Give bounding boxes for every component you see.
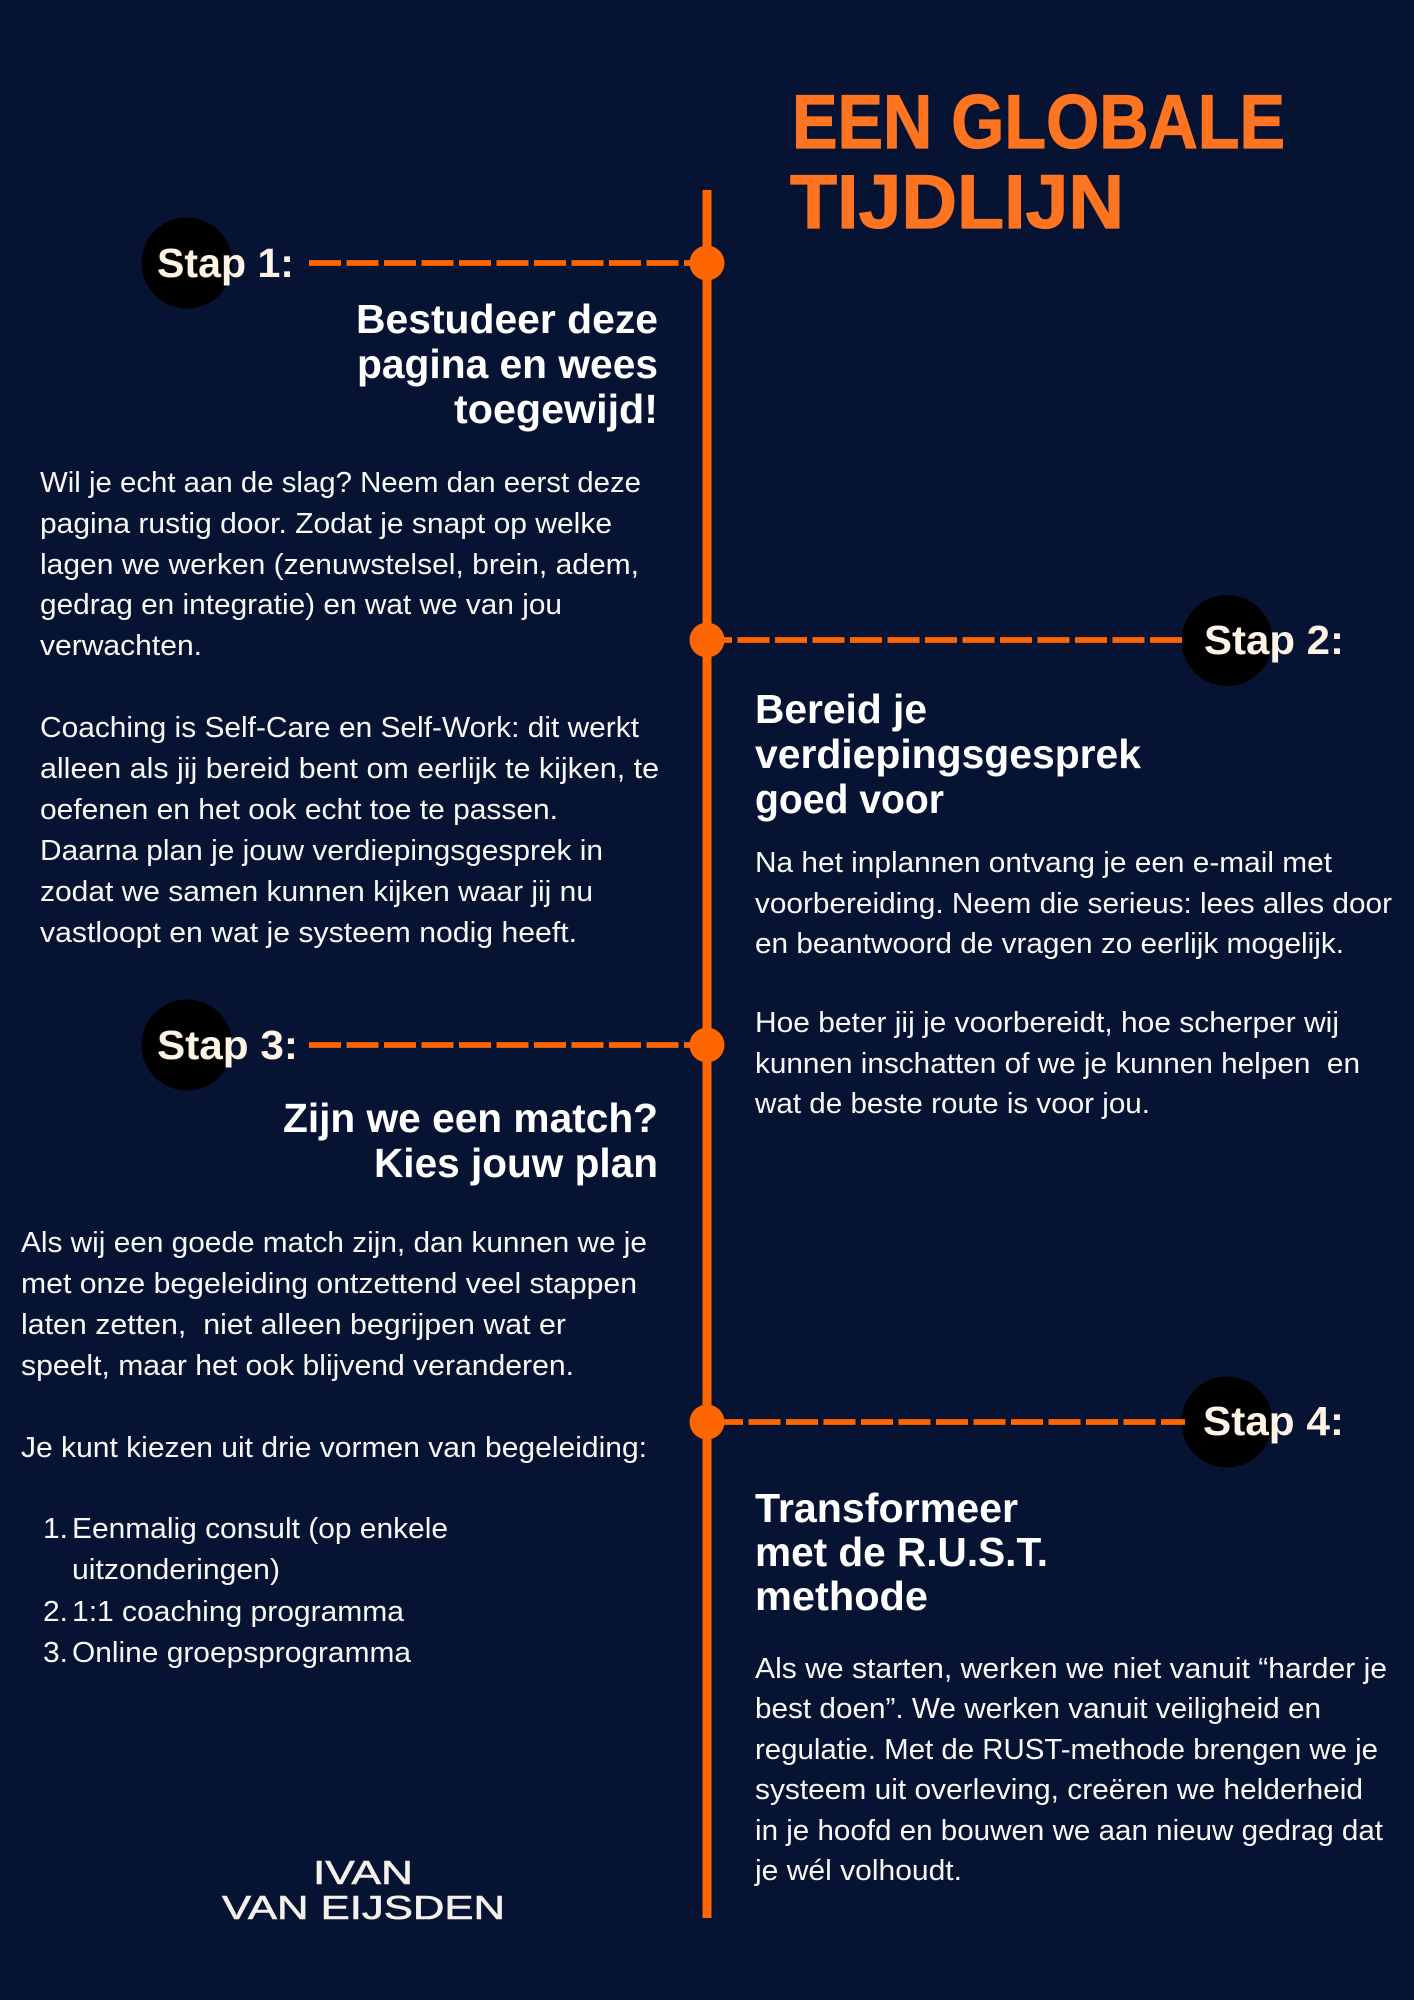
step 1 body text: Daarna plan je jouw verdiepingsgesprek in — [40, 835, 603, 867]
step 3 heading — [283, 1095, 658, 1186]
step 3 body text: Je kunt kiezen uit drie vormen van begeleiding: — [21, 1432, 647, 1464]
step 1 heading — [356, 296, 658, 432]
step 1 body text: gedrag en integratie) en wat we van jou — [40, 589, 562, 621]
step 2 heading: verdiepingsgesprek — [755, 731, 1141, 777]
numbered list: 3. — [43, 1637, 68, 1669]
logo — [222, 1854, 505, 1926]
step 4 body text — [754, 1653, 1387, 1887]
step 4 body text: je wél volhoudt. — [754, 1855, 962, 1887]
numbered list — [43, 1513, 448, 1669]
step 2 heading: goed voor — [755, 776, 944, 822]
step 1 marker: Stap 1: — [157, 240, 294, 286]
step 4 body text: regulatie. Met de RUST-methode brengen we je — [755, 1734, 1378, 1766]
timeline axis — [702, 190, 712, 1918]
numbered list: 1:1 coaching programma — [72, 1596, 405, 1628]
step 4 heading: met de R.U.S.T. — [755, 1529, 1048, 1575]
step 1 body text: zodat we samen kunnen kijken waar jij nu — [40, 876, 593, 908]
step 4 marker: Stap 4: — [1203, 1398, 1344, 1444]
step 1 body text: verwachten. — [40, 630, 202, 662]
step 2 heading — [755, 686, 1141, 822]
step 2 body text: kunnen inschatten of we je kunnen helpen en — [755, 1048, 1360, 1080]
step 3 marker — [142, 1000, 724, 1090]
step 3 marker: Stap 3: — [157, 1022, 298, 1068]
step 2 body text — [754, 847, 1392, 1120]
step 1 body text: Coaching is Self-Care en Self-Work: dit werkt — [40, 712, 639, 744]
step 1 body text: pagina rustig door. Zodat je snapt op welke — [40, 508, 612, 540]
step 2 marker: Stap 2: — [1204, 617, 1344, 663]
title — [790, 80, 1285, 245]
step 4 marker — [690, 1376, 1344, 1468]
step 2 marker — [690, 595, 1344, 686]
step 4 heading: Transformeer — [755, 1485, 1018, 1531]
step 4 body text: Als we starten, werken we niet vanuit “harder je — [755, 1653, 1387, 1685]
step 2 body text: Hoe beter jij je voorbereidt, hoe scherper wij — [755, 1007, 1339, 1039]
numbered list: Eenmalig consult (op enkele — [72, 1513, 448, 1545]
step 4 body text: best doen”. We werken vanuit veiligheid en — [755, 1693, 1321, 1725]
step 3 heading: Kies jouw plan — [374, 1140, 658, 1186]
step 3 body text: laten zetten, niet alleen begrijpen wat er — [21, 1309, 566, 1341]
step 1 body text: Wil je echt aan de slag? Neem dan eerst deze — [40, 467, 641, 499]
step 2 body text: voorbereiding. Neem die serieus: lees alles door — [755, 888, 1392, 920]
numbered list: uitzonderingen) — [72, 1554, 280, 1586]
step 3 body text: speelt, maar het ook blijvend veranderen. — [21, 1350, 574, 1382]
step 3 heading: Zijn we een match? — [283, 1095, 658, 1141]
step 1 marker — [142, 218, 724, 308]
step 2 body text: en beantwoord de vragen zo eerlijk mogelijk. — [755, 928, 1344, 960]
step 1 heading: Bestudeer deze — [356, 296, 658, 342]
step 3 body text: met onze begeleiding ontzettend veel stappen — [21, 1268, 637, 1300]
step 1 body text: alleen als jij bereid bent om eerlijk te kijken, te — [40, 753, 659, 785]
step 4 heading — [755, 1485, 1048, 1619]
step 1 heading: pagina en wees — [357, 341, 658, 387]
step 4 body text: systeem uit overleving, creëren we helderheid — [755, 1774, 1363, 1806]
title: TIJDLIJN — [790, 160, 1124, 245]
numbered list: Online groepsprogramma — [72, 1637, 412, 1669]
step 1 body text: lagen we werken (zenuwstelsel, brein, adem, — [40, 549, 639, 581]
step 3 body text: Als wij een goede match zijn, dan kunnen we je — [21, 1227, 647, 1259]
step 1 heading: toegewijd! — [454, 386, 658, 432]
title: EEN GLOBALE — [792, 80, 1285, 165]
step 1 body text — [40, 467, 659, 949]
logo: IVAN — [313, 1854, 413, 1891]
step 3 body text — [21, 1227, 647, 1669]
numbered list: 1. — [43, 1513, 68, 1545]
numbered list: 2. — [43, 1596, 68, 1628]
step 1 body text: vastloopt en wat je systeem nodig heeft. — [40, 917, 577, 949]
step 4 body text: in je hoofd en bouwen we aan nieuw gedrag dat — [755, 1815, 1383, 1847]
step 2 heading: Bereid je — [755, 686, 927, 732]
step 2 body text: Na het inplannen ontvang je een e-mail met — [755, 847, 1332, 879]
step 2 body text: wat de beste route is voor jou. — [754, 1088, 1150, 1120]
step 4 heading: methode — [755, 1573, 928, 1619]
step 1 body text: oefenen en het ook echt toe te passen. — [40, 794, 558, 826]
logo: VAN EIJSDEN — [222, 1889, 505, 1926]
